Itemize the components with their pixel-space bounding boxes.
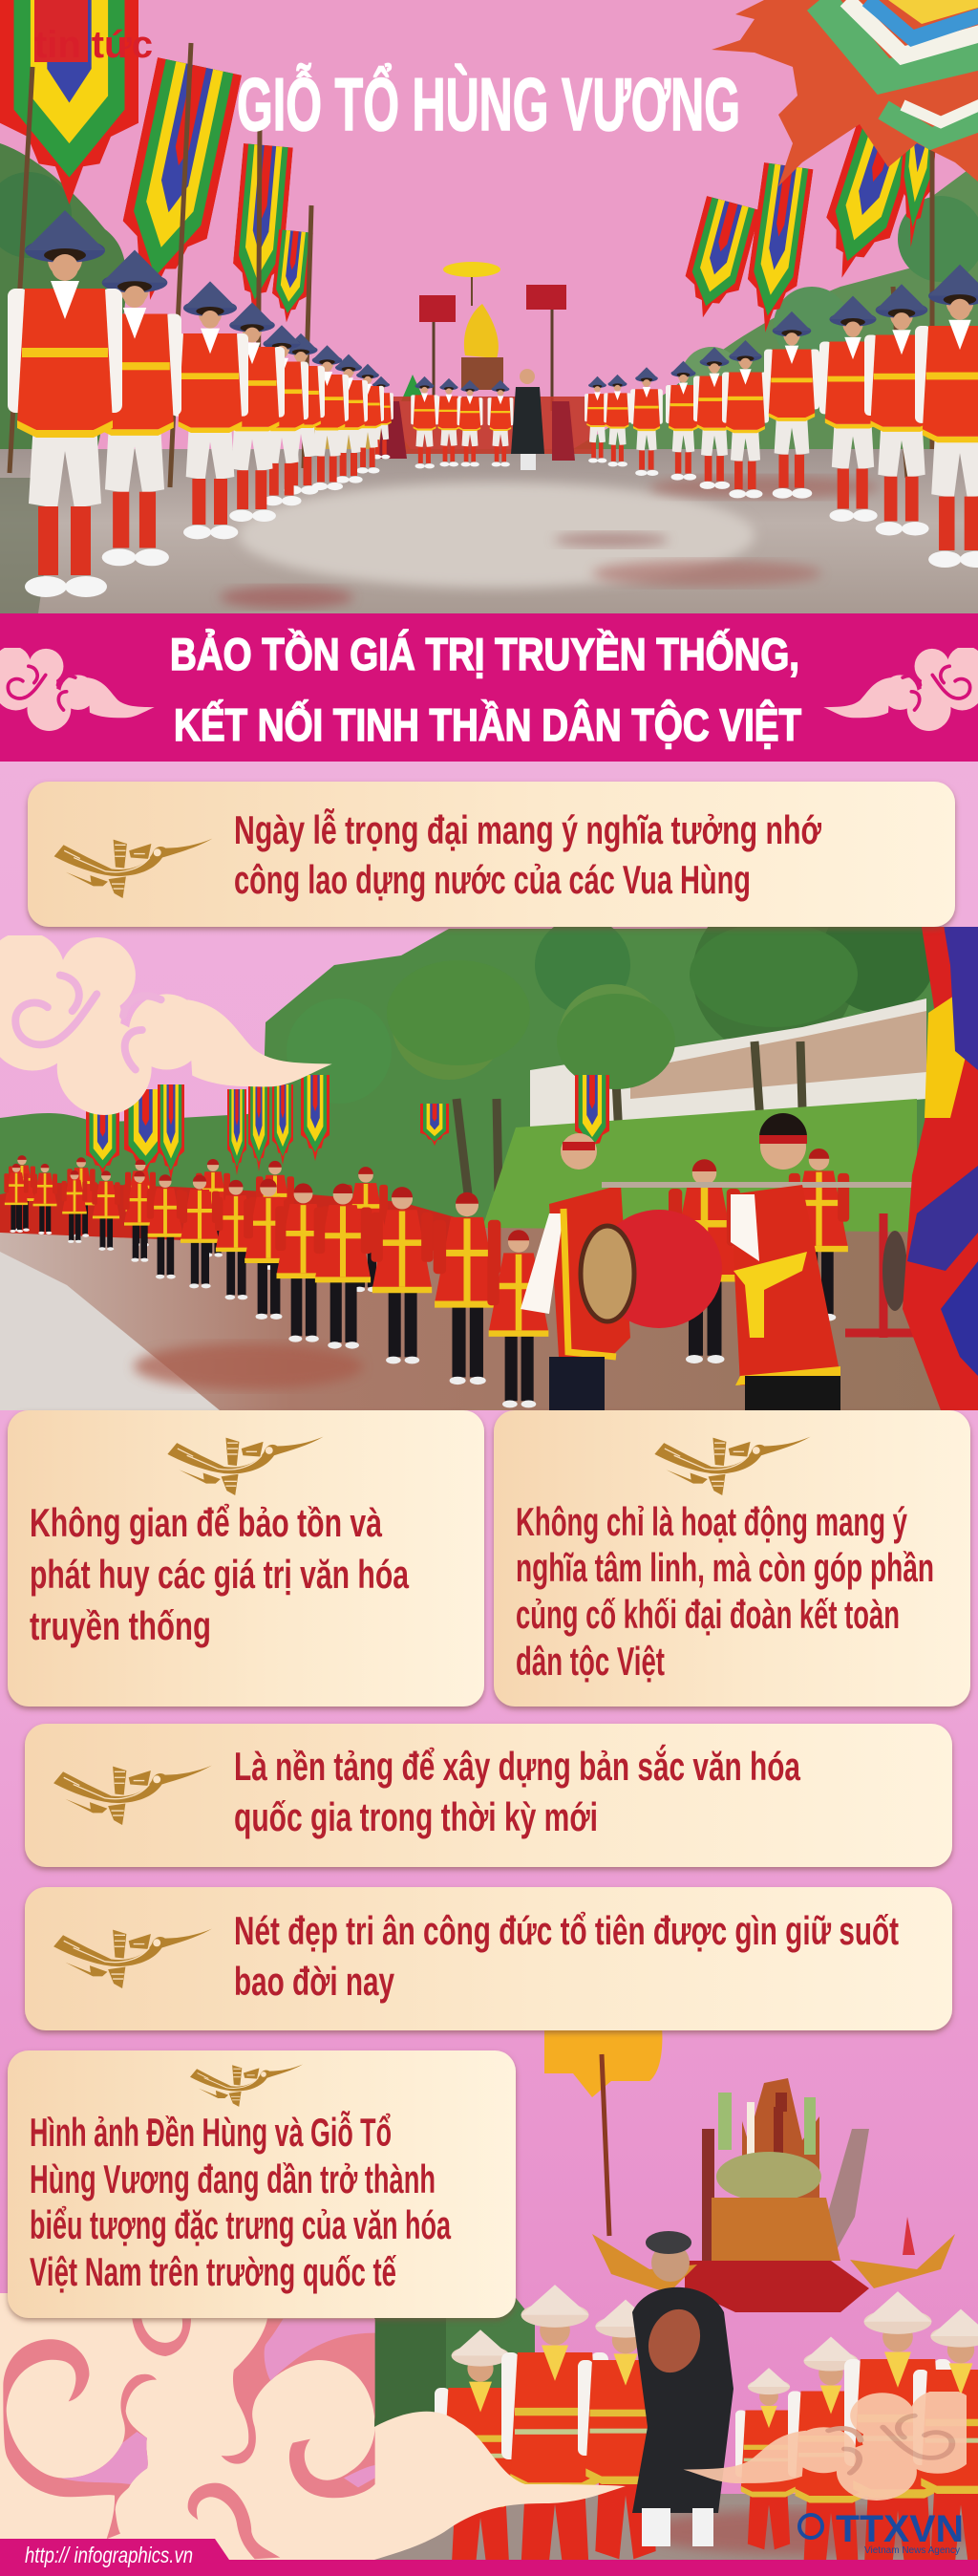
cloud top-left [0,932,332,1115]
icon: bird [167,1437,324,1495]
icon: bird [190,2065,303,2107]
card 2 text: Không gian để bảo tồn và [30,1500,382,1545]
subtitle line 2: KẾT NỐI TINH THẦN DÂN TỘC VIỆT [174,699,801,750]
card 2 text: truyền thống [30,1603,211,1648]
icon: bird [654,1437,811,1495]
lawn [478,1099,917,1242]
logo: tin tuc: tin tức [34,24,153,66]
band cloud right [823,646,978,731]
pavement [0,1223,978,1410]
big flag right [903,927,978,1410]
cloud bottom-right [683,2390,978,2501]
mural wall [530,998,926,1129]
man in black with drum [632,2231,734,2546]
card 6 text: Hùng Vương đang dần trở thành [30,2157,436,2201]
marchers left [8,210,393,597]
trees [0,927,934,1222]
band cloud left [0,646,155,731]
small flags [86,1075,609,1180]
card 1 text: công lao dựng nước của các Vua Hùng [234,857,751,902]
card 6 [8,2050,516,2318]
card 1 [28,782,955,927]
hero photo: procession [0,0,978,613]
palanquin [592,2078,955,2312]
subtitle line 1: BẢO TỒN GIÁ TRỊ TRUYỀN THỐNG, [170,629,799,679]
link tab [0,2539,229,2576]
card 3 text: dân tộc Việt [516,1639,665,1684]
foliage and ground [374,2297,968,2560]
icon: bird [53,1766,212,1825]
card 6 text: Việt Nam trên trường quốc tế [30,2249,396,2294]
bearers [435,2285,978,2576]
distant procession [378,369,592,470]
link tab: http:// infographics.vn [25,2543,193,2567]
bottom strip [0,2560,978,2576]
hero sky [0,0,978,468]
icon: bird [53,1929,212,1988]
card 3 text [516,1499,934,1684]
card 6 text [30,2109,451,2294]
drum [581,1210,722,1328]
cloud bottom-left [0,2293,626,2560]
logo: TTXVN: TTXVN [836,2508,964,2550]
central statue and banners [401,262,566,420]
card 6 text: biểu tượng đặc trưng của văn hóa [30,2202,451,2247]
card 2 text [30,1500,409,1648]
logo: TTXVN: Vietnam News Agency [864,2545,960,2556]
gong stand [845,1213,913,1338]
card 4 text [234,1743,800,1839]
card 2 text: phát huy các giá trị văn hóa [30,1552,409,1597]
card 6 text: Hình ảnh Đền Hùng và Giỗ Tổ [30,2109,392,2155]
card 1 text [234,806,821,902]
marchers right [585,265,978,568]
subtitle band [0,613,978,762]
hero flags [0,0,945,487]
drum carrier [731,1113,840,1410]
drummer [521,1133,630,1410]
card 2 [8,1410,484,1707]
marchers row [0,1148,849,1407]
card 5 text: bao đời nay [234,1959,394,2004]
card 4 text: quốc gia trong thời kỳ mới [234,1794,598,1839]
card 5 text [234,1908,899,2004]
hero top-right banner [712,0,978,186]
hero pavement [0,449,978,613]
card 4 [25,1724,952,1867]
card 3 [494,1410,970,1707]
card 5 [25,1887,952,2030]
bottom photo: palanquin [374,2026,978,2576]
carrying pole [602,1182,917,1188]
logo: TTXVN [799,2508,964,2556]
palm trees [387,922,858,1194]
photo: drum procession [0,927,978,1410]
parasol [544,2026,662,2236]
hero foliage [0,143,978,459]
icon: bird [54,839,212,898]
